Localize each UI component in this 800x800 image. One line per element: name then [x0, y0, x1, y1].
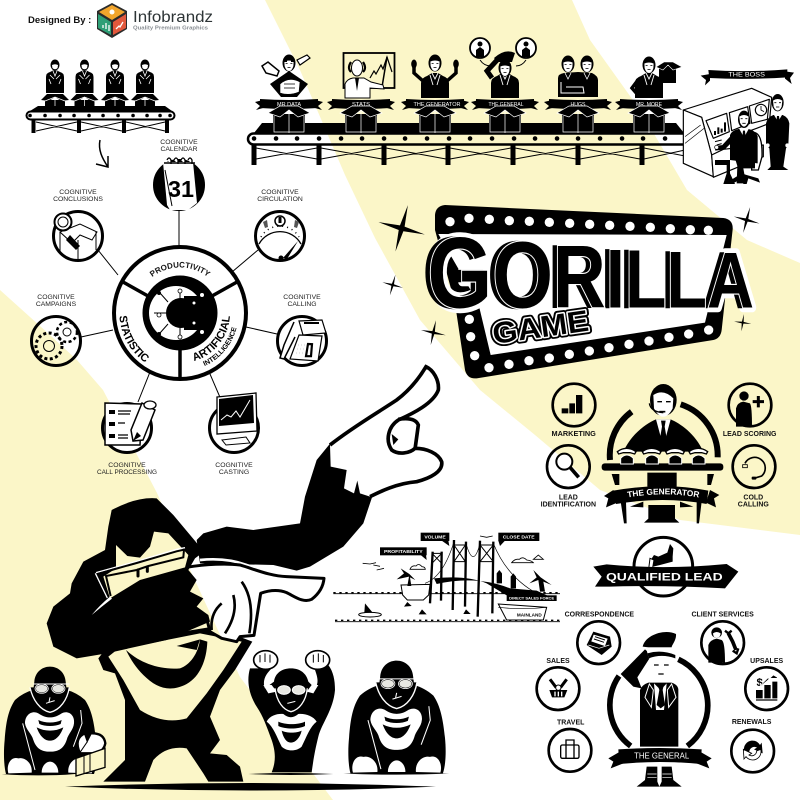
palm trees	[397, 568, 552, 592]
character: Hugs: HUGS	[570, 102, 586, 108]
icon: client services: CLIENT SERVICES	[691, 612, 754, 619]
The Boss console	[683, 69, 794, 184]
wheel with three segments: STATISTIC	[120, 316, 149, 362]
qualified lead badge: QUALIFIED LEAD	[606, 571, 723, 583]
character: The Generator	[401, 54, 469, 133]
icon: marketing	[551, 384, 596, 438]
character: Mr Data: MR DATA	[277, 102, 301, 108]
shark and fish	[359, 602, 471, 617]
label: volume: VOLUME	[424, 535, 446, 541]
icon: cognitive campaigns: COGNITIVE	[37, 294, 75, 301]
forehead yellow	[103, 532, 188, 598]
character: Hugs	[544, 56, 612, 133]
wheel with three segments	[112, 245, 248, 381]
ground shadow	[65, 783, 436, 790]
icon: cognitive calendar: COGNITIVE	[160, 139, 198, 146]
icon: cognitive calendar	[154, 139, 204, 210]
icon: cognitive circulation	[256, 189, 304, 260]
head and forearm silhouette	[47, 498, 210, 658]
icon: cognitive calling: COGNITIVE	[283, 294, 321, 301]
icon: cognitive campaigns	[32, 294, 80, 366]
small gorilla standing	[343, 661, 449, 775]
seated man	[715, 111, 762, 184]
wheel with three segments: INTELLIGENCE	[202, 326, 236, 366]
sliver highlight on forearm	[92, 597, 112, 615]
icon: cognitive casting	[210, 393, 258, 476]
label: close date: CLOSE DATE	[503, 535, 535, 541]
icon: travel: TRAVEL	[557, 719, 585, 726]
water lines	[333, 593, 560, 622]
raised arm	[197, 442, 373, 571]
arrow	[96, 140, 108, 167]
icon: cognitive call processing: COGNITIVE	[108, 462, 146, 469]
icon: cognitive casting: CASTING	[219, 469, 249, 476]
qualified lead badge	[593, 537, 738, 596]
saluting general: THE GENERAL	[634, 750, 690, 760]
cognitive wheel	[30, 139, 328, 476]
standing man	[766, 94, 789, 170]
icon: upsales	[745, 658, 788, 710]
icon: cognitive circulation: CIRCULATION	[257, 196, 303, 203]
icon: cold calling: COLD	[743, 494, 763, 501]
icon: cognitive calling: CALLING	[287, 301, 317, 308]
icon: cognitive call processing	[97, 401, 157, 476]
stars	[372, 199, 763, 348]
icon: lead identification: IDENTIFICATION	[541, 502, 596, 509]
big conveyor belt	[248, 123, 698, 165]
label: profitability	[380, 547, 427, 560]
banner: The Boss: THE BOSS	[728, 72, 766, 79]
icon: cognitive campaigns: CAMPAIGNS	[36, 301, 77, 308]
operator with phones and podium	[602, 384, 724, 524]
icon: upsales: $	[757, 677, 764, 689]
chin	[108, 633, 242, 720]
icon: renewals	[731, 719, 774, 772]
character: Stats	[327, 53, 395, 133]
icon: lead scoring	[723, 384, 776, 438]
label: volume	[421, 533, 449, 546]
character: The General: THE GENERAL	[488, 102, 524, 108]
icon: renewals: RENEWALS	[732, 719, 772, 726]
smile	[126, 639, 207, 688]
people on bridge	[497, 570, 516, 588]
island and mainland	[401, 584, 547, 620]
bridge	[425, 540, 553, 617]
The General group	[537, 611, 788, 787]
icon: cognitive call processing: CALL PROCESSING	[97, 469, 157, 476]
banner: The Generator: THE GENERATOR	[626, 488, 700, 498]
title: GORILLA: GORILLA	[427, 216, 754, 329]
label: profitability: PROFITABILITY	[384, 549, 423, 555]
icon: cold calling	[733, 445, 775, 509]
saluting general	[608, 632, 712, 787]
character: Stats: STATS	[352, 102, 370, 108]
icon: cold calling: CALLING	[738, 502, 769, 509]
icon: Infobrandz hexagon logo	[97, 3, 127, 38]
control desk	[683, 88, 772, 177]
Gorilla Game sign	[372, 199, 763, 378]
marquee lights	[445, 214, 713, 372]
pointing hand outline	[187, 559, 324, 642]
icon: correspondence: CORRESPONDENCE	[565, 611, 634, 618]
small gorilla with raised fists	[248, 651, 335, 775]
icon: lead identification: LEAD	[559, 494, 578, 501]
character: Mr Data	[255, 54, 323, 133]
character: The Generator: THE GENERATOR	[414, 102, 461, 108]
icon: cognitive circulation: COGNITIVE	[261, 189, 299, 196]
bridge scene	[333, 533, 560, 622]
icon: upsales: UPSALES	[750, 658, 783, 665]
icon: lead scoring: LEAD SCORING	[723, 431, 776, 438]
icon: marketing: MARKETING	[551, 429, 596, 438]
icon: cognitive casting: COGNITIVE	[215, 462, 253, 469]
torso and legs	[98, 627, 252, 782]
icon: cognitive calendar: CALENDAR	[160, 146, 198, 153]
icon: sales	[537, 658, 579, 710]
header: designed by Infobrandz: Designed By :	[28, 15, 91, 26]
icon: lead identification	[541, 445, 596, 509]
icon: cognitive calendar: 31	[168, 176, 194, 202]
island and mainland: MAINLAND	[517, 613, 542, 618]
subtitle: GAME: GAME	[490, 304, 591, 351]
The Generator group	[541, 382, 777, 524]
clouds and birds	[363, 536, 543, 570]
header: designed by Infobrandz	[28, 3, 213, 38]
character: The General	[470, 38, 539, 133]
label: direct sales force: DIRECT SALES FORCE	[509, 597, 555, 601]
glasses	[95, 548, 185, 598]
icon: cognitive conclusions: CONCLUSIONS	[53, 196, 103, 203]
icon: travel	[549, 719, 591, 772]
label: close date	[498, 533, 539, 546]
icon: cognitive calling	[278, 294, 326, 366]
title: GORILLA: GORILLA	[427, 216, 754, 329]
header: designed by Infobrandz: Quality Premium Graphics	[133, 26, 208, 32]
icon: correspondence	[565, 611, 634, 664]
icon: client services	[691, 612, 754, 664]
small conveyor belt with four people	[26, 60, 174, 133]
icon: sales: SALES	[546, 658, 570, 665]
raised hand	[330, 367, 442, 497]
wheel with three segments: PRODUCTIVITY	[150, 262, 211, 277]
pointing hand fill	[187, 564, 324, 642]
label: direct sales force	[507, 595, 557, 601]
marquee frame	[435, 205, 733, 378]
wheel with three segments: ARTIFICIAL	[194, 316, 230, 361]
spokes	[81, 211, 277, 402]
icon: cognitive conclusions	[53, 189, 103, 260]
gorillas	[2, 367, 449, 790]
header: designed by Infobrandz: Infobrandz	[133, 9, 213, 26]
big gorilla	[47, 367, 442, 790]
title: GORILLA: GORILLA	[423, 216, 749, 329]
character: Mr More	[615, 56, 683, 133]
subtitle: GAME: GAME	[490, 304, 591, 351]
character: Mr More: MR. MORE	[636, 102, 662, 108]
icon: cognitive conclusions: COGNITIVE	[59, 189, 97, 196]
small gorilla with gift box	[2, 667, 105, 776]
